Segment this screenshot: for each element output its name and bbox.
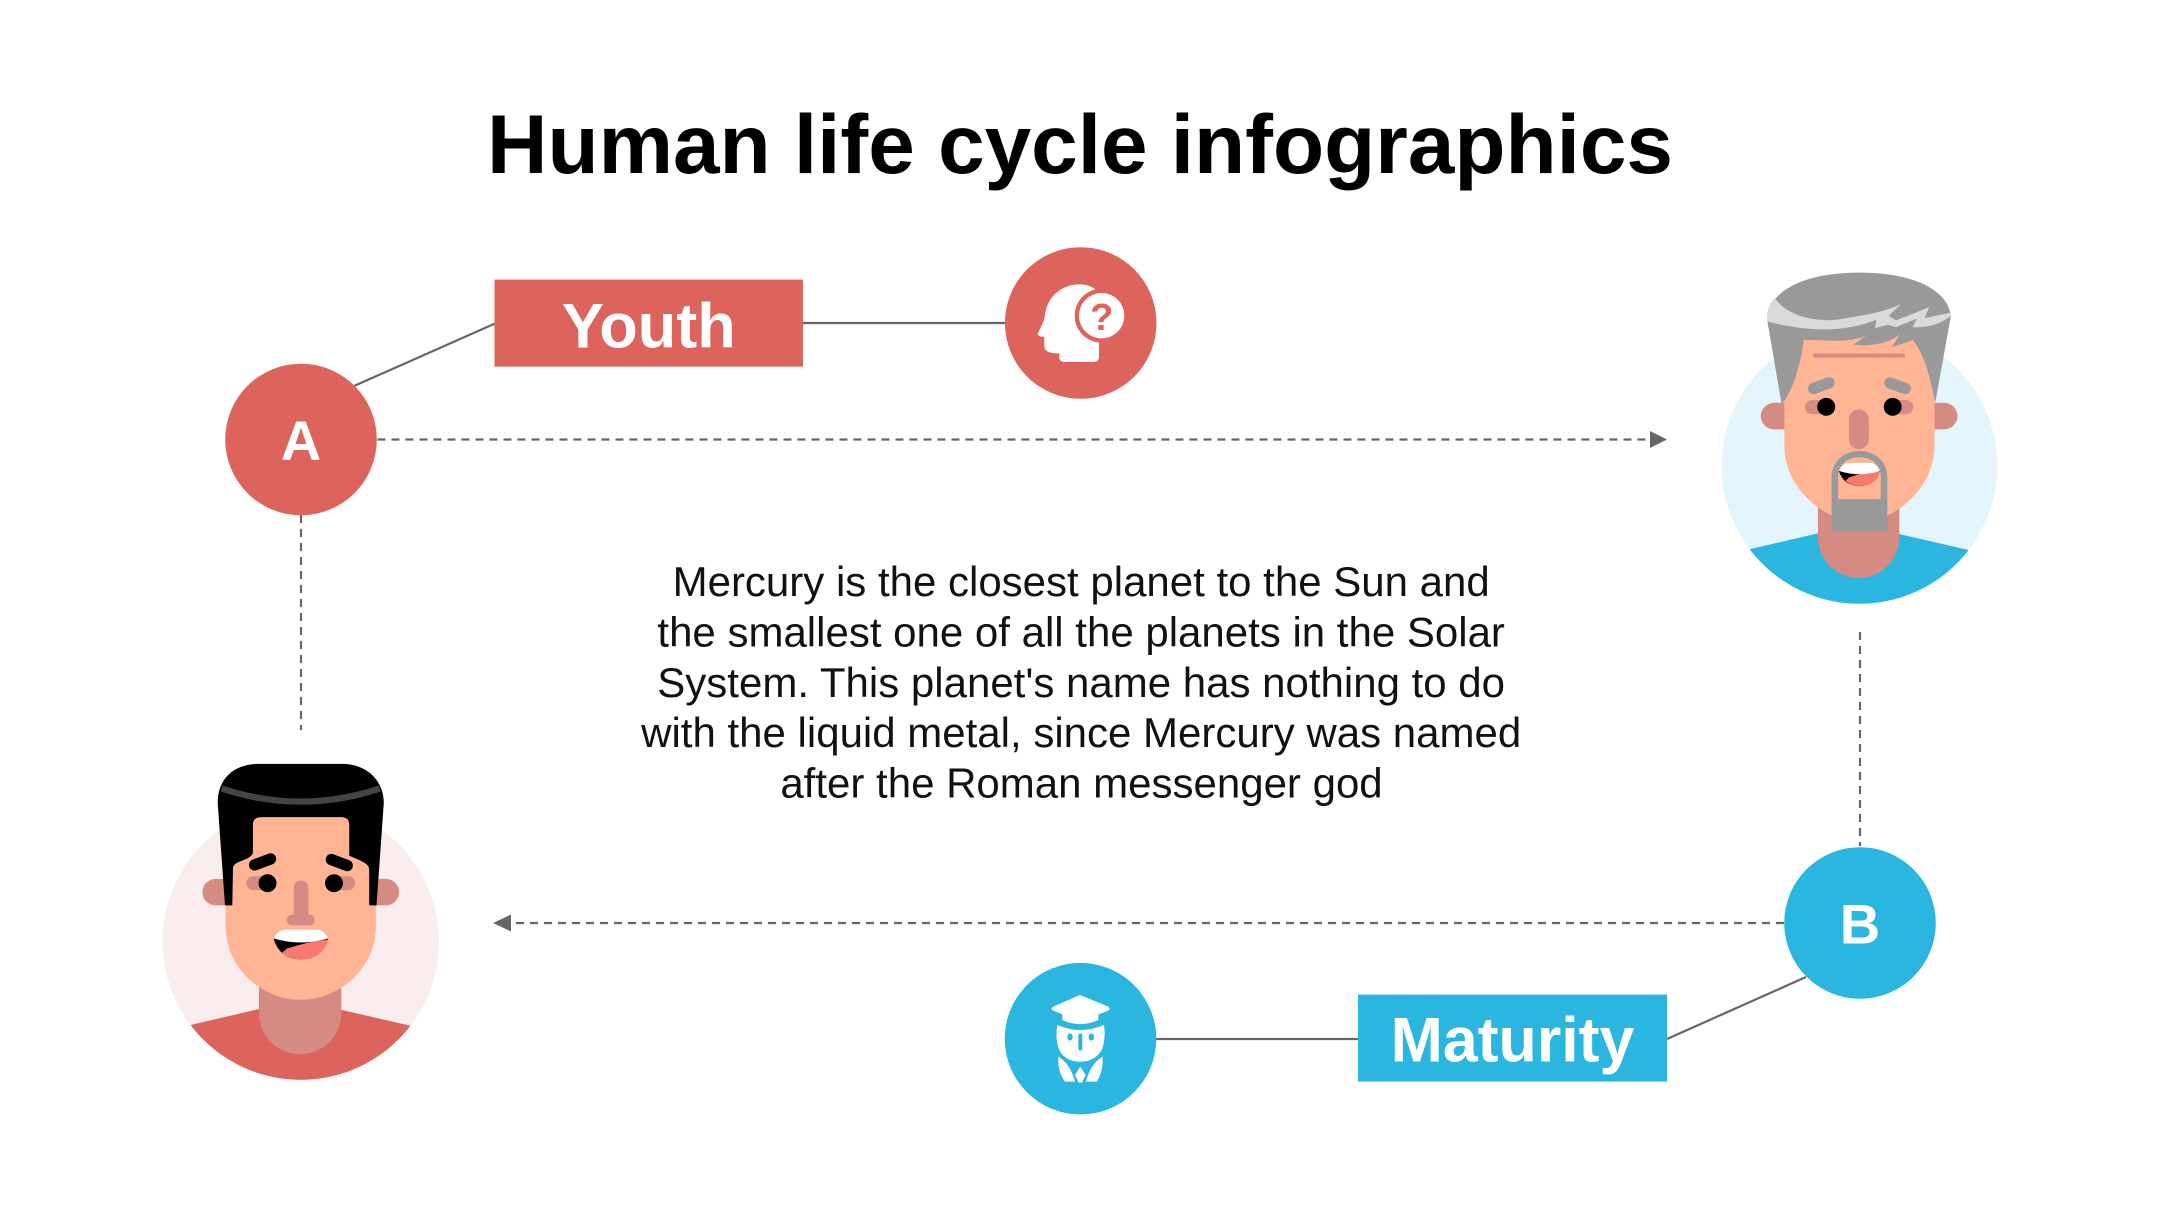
icon: owl with graduation cap (1005, 963, 1156, 1114)
label: Youth (494, 280, 803, 367)
connector: Maturity label to owl icon (1154, 1038, 1358, 1040)
arrow: B to young (493, 914, 1784, 932)
arrow: elder to B (1859, 632, 1861, 846)
circle marker A (225, 364, 377, 515)
portrait: elder man (1722, 273, 1997, 615)
arrow: young to A (300, 515, 302, 730)
connector: B to Maturity label (1667, 977, 1806, 1039)
text block: Mercury description: with the liquid metal, since Mercury was named (640, 709, 1521, 756)
connector: Youth label to head icon (803, 322, 1008, 324)
title: Human life cycle infographics (487, 97, 1673, 191)
text block: Mercury description: System. This planet's name has nothing to do (657, 659, 1505, 706)
icon: head with question mark: ? (1090, 297, 1113, 339)
icon: head with question mark (1005, 247, 1156, 399)
label: Youth: Youth (562, 292, 736, 362)
circle marker B: B (1840, 892, 1880, 956)
label: Maturity: Maturity (1391, 1006, 1635, 1076)
connector: A to Youth label (354, 324, 494, 386)
text block: Mercury description: the smallest one of all the planets in the Solar (657, 608, 1505, 655)
portrait: young man (163, 764, 439, 1092)
text block: Mercury description: Mercury is the closest planet to the Sun and (673, 558, 1490, 605)
label: Maturity (1358, 995, 1667, 1082)
circle marker B (1784, 847, 1936, 999)
arrow: A to elder (378, 431, 1667, 448)
circle marker A: A (281, 409, 321, 472)
text block: Mercury description: after the Roman messenger god (780, 760, 1383, 807)
